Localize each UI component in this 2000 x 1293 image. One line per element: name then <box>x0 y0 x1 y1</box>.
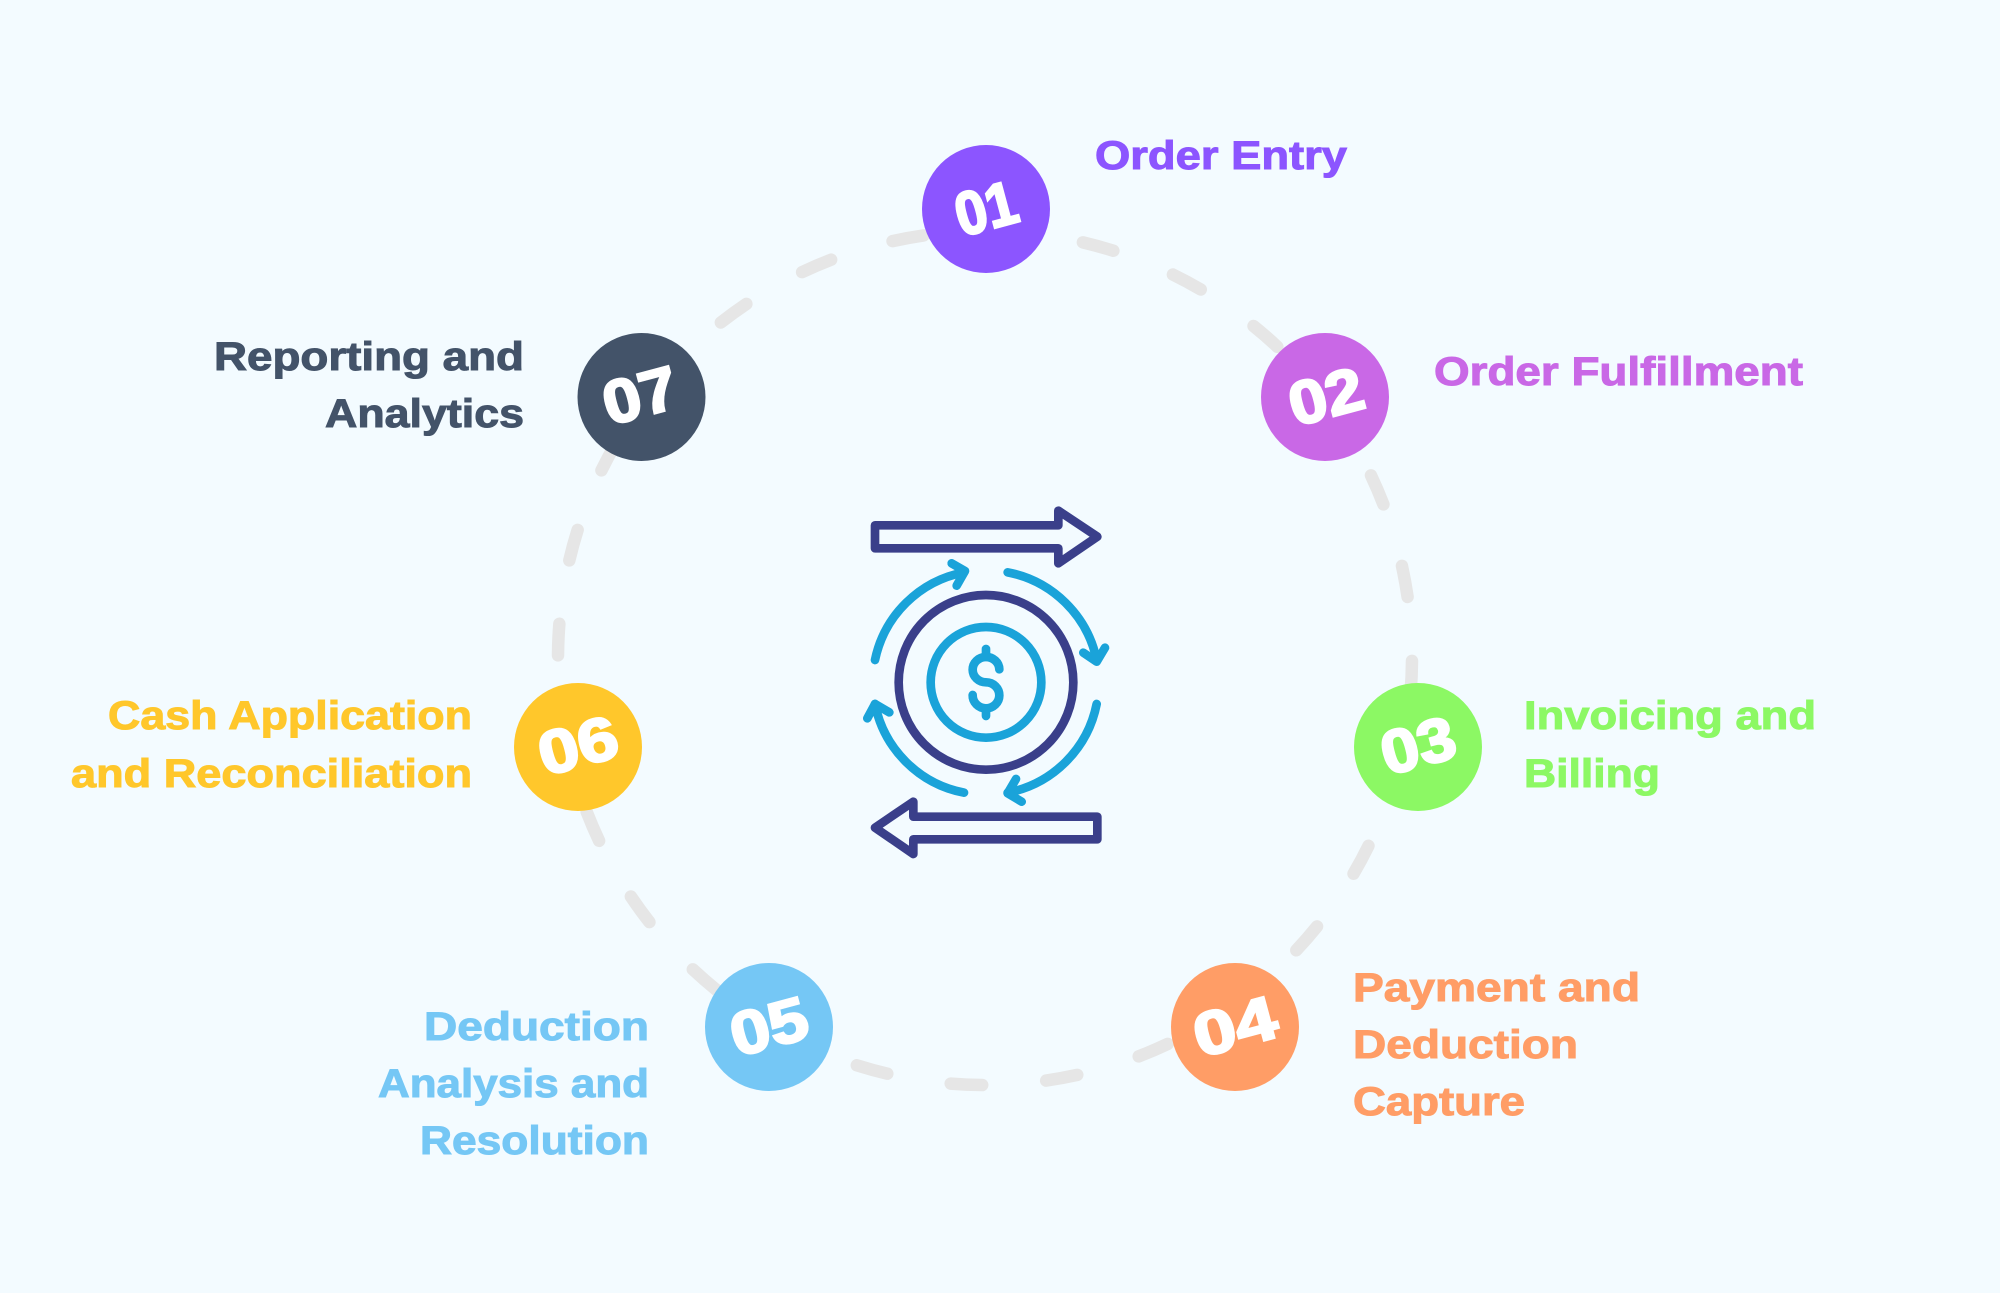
label: Reporting and Analytics: Reporting and <box>214 335 524 379</box>
label: Cash Application and Reconciliation: and Reconciliation <box>71 752 472 796</box>
label: Payment and Deduction Capture: Payment and <box>1353 966 1640 1010</box>
badge 03 <box>1354 683 1482 811</box>
label: Payment and Deduction Capture <box>1353 966 1640 1124</box>
badge 01: 01 <box>947 168 1025 249</box>
badge 01 <box>922 145 1050 273</box>
step 01: Order Entry <box>922 134 1348 273</box>
step 06: Cash Application and Reconciliation <box>71 683 642 811</box>
central icon: dollar cycle with opposing arrows <box>867 511 1105 854</box>
badge 03: 03 <box>1373 703 1463 788</box>
icon: circular arrow top left <box>875 563 965 660</box>
badge 07: 07 <box>595 353 685 438</box>
step 03: Invoicing and Billing <box>1354 683 1816 811</box>
dashed cycle ring <box>555 228 1415 1088</box>
step 04: Payment and Deduction Capture <box>1171 963 1640 1124</box>
icon: circular arrow bottom right <box>1008 704 1097 802</box>
label: Order Entry: Order Entry <box>1095 134 1348 178</box>
label: Deduction Analysis and Resolution <box>378 1005 649 1163</box>
label: Deduction Analysis and Resolution: Analysis and <box>378 1062 649 1106</box>
label: Order Fulfillment: Order Fulfillment <box>1434 350 1803 394</box>
label: Invoicing and Billing: Billing <box>1524 752 1660 796</box>
label: Payment and Deduction Capture: Capture <box>1353 1080 1525 1124</box>
badge 05: 05 <box>723 984 816 1069</box>
label: Reporting and Analytics <box>214 335 524 436</box>
label: Deduction Analysis and Resolution: Resolution <box>420 1119 649 1163</box>
icon: bottom left arrow <box>875 802 1097 854</box>
badge 02: 02 <box>1281 354 1371 439</box>
badge 06: 06 <box>531 702 626 789</box>
label: Cash Application and Reconciliation <box>71 694 472 796</box>
label: Reporting and Analytics: Analytics <box>325 392 524 436</box>
icon: outer coin ring <box>899 595 1073 770</box>
icon: dollar sign <box>973 649 999 716</box>
badge 04: 04 <box>1186 983 1285 1070</box>
label: Deduction Analysis and Resolution: Deduction <box>424 1005 649 1049</box>
badge 07 <box>578 333 706 461</box>
step 05: Deduction Analysis and Resolution <box>378 963 833 1163</box>
icon: top right arrow <box>875 511 1097 563</box>
badge 04 <box>1171 963 1299 1091</box>
badge 06 <box>514 683 642 811</box>
label: Invoicing and Billing: Invoicing and <box>1524 694 1816 738</box>
label: Payment and Deduction Capture: Deduction <box>1353 1023 1578 1067</box>
step 07: Reporting and Analytics <box>214 333 706 461</box>
badge 02 <box>1261 333 1389 461</box>
label: Invoicing and Billing <box>1524 694 1816 796</box>
step 02: Order Fulfillment <box>1261 333 1803 461</box>
badge 05 <box>705 963 833 1091</box>
icon: circular arrow bottom left <box>867 704 964 793</box>
icon: inner coin ring <box>931 627 1041 738</box>
label: Cash Application and Reconciliation: Cash Application <box>108 694 472 738</box>
icon: circular arrow top right <box>1008 572 1105 662</box>
